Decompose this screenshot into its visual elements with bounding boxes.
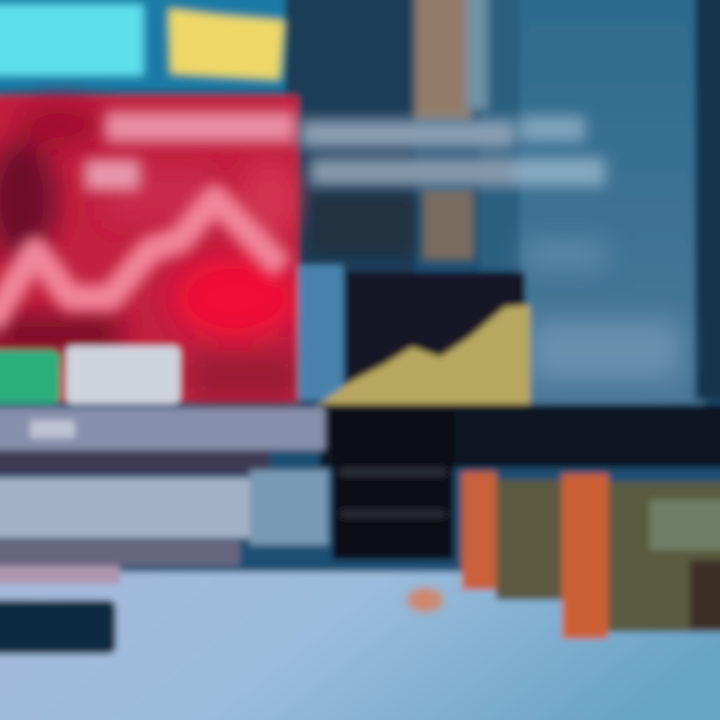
dark red chart patches	[0, 101, 300, 402]
blurred headline row 1	[300, 116, 585, 148]
blurred white label in red panel	[85, 160, 140, 190]
tan vertical column	[414, 0, 488, 260]
panel: red chart	[0, 96, 300, 402]
gold area chart	[318, 305, 530, 408]
olive box left	[496, 480, 562, 600]
panel: top backdrop	[0, 0, 525, 280]
pink zigzag line chart	[0, 198, 282, 325]
blurred white heading in red panel	[105, 112, 295, 142]
green button	[0, 350, 60, 404]
blurred headline row 2	[310, 158, 605, 186]
black table panel	[332, 410, 454, 560]
orange bar left	[462, 472, 496, 590]
floor	[0, 572, 720, 720]
cyan top card	[0, 4, 144, 76]
dark pill	[0, 600, 116, 654]
white button	[66, 346, 180, 404]
yellow top card	[168, 8, 285, 80]
dark band across middle	[320, 404, 720, 468]
panel: grey striped stack	[0, 408, 328, 584]
dark text block under headline	[310, 195, 415, 255]
small orange marker	[407, 588, 443, 612]
panel: right steel-blue column	[520, 0, 720, 405]
blurred right column text	[525, 240, 680, 380]
dark chart panel	[345, 272, 525, 407]
blue strip beside red panel	[298, 265, 343, 400]
orange bar right	[562, 474, 608, 639]
olive box right	[608, 482, 720, 632]
